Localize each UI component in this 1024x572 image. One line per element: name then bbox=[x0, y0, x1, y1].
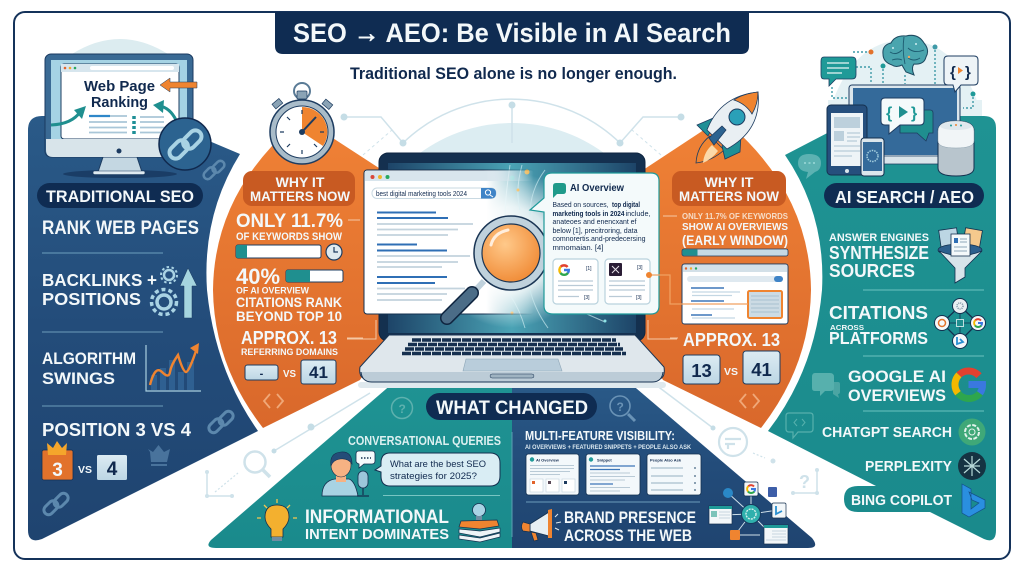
stat: approx 13 referring domains: 41 bbox=[309, 363, 328, 382]
stat: approx 13 referring domains: VS bbox=[283, 368, 296, 380]
icon: laptop bbox=[849, 85, 960, 164]
overview paragraph: marketing tools in 2024 bbox=[552, 209, 624, 218]
icon: play code bubble: } bbox=[911, 105, 917, 122]
stat: 40 percent bbox=[236, 264, 343, 324]
icon: dark teal bubble bbox=[900, 110, 933, 141]
text: answer engines synthesize sources bbox=[829, 232, 929, 281]
chart: algorithm line bbox=[146, 343, 201, 391]
text: multi-feature visibility: AI OVERVIEWS + FEATURED SNIPPETS + PEOPLE ALSO ASK bbox=[525, 444, 691, 451]
card: AI overview bbox=[526, 454, 579, 495]
stat: approx 13 referring domains: APPROX. 13 bbox=[241, 328, 337, 348]
stat: only 11.7 percent: ONLY 11.7% bbox=[236, 211, 343, 232]
laptop bbox=[358, 153, 666, 388]
stat: 40 percent: BEYOND TOP 10 bbox=[236, 309, 342, 324]
laptop base bbox=[360, 335, 664, 380]
text: algorithm swings: ALGORITHM bbox=[42, 350, 136, 368]
icon: Bing logo bbox=[962, 484, 985, 517]
subtitle: Traditional SEO alone is no longer enough. bbox=[350, 65, 677, 83]
icon: rank tiles 3 vs 4: 3 bbox=[52, 460, 63, 481]
icon: gears and up arrow bbox=[152, 267, 197, 318]
icon: books with bulb bbox=[459, 504, 500, 542]
arrow: teal right bbox=[160, 106, 176, 120]
icon: tablet bbox=[827, 105, 867, 175]
icon: Google logo bbox=[955, 371, 983, 399]
icon: rank tiles 3 vs 4 bbox=[42, 441, 127, 481]
icon: person with microphone bbox=[322, 451, 375, 496]
panel: what changed multi-feature background bbox=[512, 383, 815, 548]
heading: traditional SEO: TRADITIONAL SEO bbox=[46, 187, 194, 206]
text: conversational queries: CONVERSATIONAL QUERIES bbox=[348, 434, 501, 448]
stat: approx 13 vs 41 right: APPROX. 13 bbox=[683, 330, 780, 350]
source card: X: [3] bbox=[637, 265, 643, 271]
card: AI overview: AI Overview bbox=[536, 458, 560, 462]
source card: X: [3] bbox=[636, 295, 642, 301]
search query text: best digital marketing tools 2024 bbox=[376, 191, 467, 198]
icon: code brackets right bbox=[740, 394, 759, 408]
text: brand presence across the web bbox=[564, 509, 696, 545]
text: web page ranking: Web Page bbox=[84, 78, 155, 95]
icon: smart speaker bbox=[938, 121, 974, 176]
text: ChatGPT search: CHATGPT SEARCH bbox=[822, 425, 952, 441]
source card: Google: [3] bbox=[584, 295, 590, 301]
illustration: AI devices bbox=[821, 35, 982, 176]
text: algorithm swings: SWINGS bbox=[42, 370, 115, 388]
icon: help bubble: ? bbox=[398, 402, 406, 416]
text: answer engines synthesize sources: ANSWER ENGINES bbox=[829, 232, 929, 244]
dotted connectors bbox=[832, 50, 973, 108]
text: web page ranking: Ranking bbox=[91, 94, 148, 111]
text: multi-feature visibility bbox=[525, 428, 691, 451]
icon: funnel of sources bbox=[938, 228, 982, 283]
text: rank web pages: RANK WEB PAGES bbox=[42, 218, 199, 239]
icon: brain bbox=[883, 35, 928, 75]
divider between sections bbox=[511, 432, 513, 537]
icon: search help bbox=[610, 396, 635, 421]
text: brand presence across the web: ACROSS THE WEB bbox=[564, 527, 692, 545]
title: SEO → AEO: Be Visible in AI Search bbox=[293, 18, 731, 48]
overview paragraph: top digital bbox=[612, 200, 640, 209]
keyboard bbox=[402, 340, 626, 354]
overview paragraph: anateoes and enencxant ef bbox=[552, 217, 636, 226]
stat: 40 percent: OF AI OVERVIEW bbox=[236, 286, 309, 296]
browser window with search results bbox=[364, 170, 534, 314]
panel: why it matters left background bbox=[213, 118, 385, 428]
icon: phone bbox=[861, 138, 884, 176]
heading: what changed: WHAT CHANGED bbox=[436, 398, 588, 419]
card: people also ask: People Also Ask bbox=[650, 458, 682, 462]
icon: chat bubble bbox=[821, 57, 856, 86]
stat: 40 percent: CITATIONS RANK bbox=[236, 295, 342, 310]
stat: keywords early window bbox=[682, 211, 788, 256]
source card: X bbox=[605, 259, 650, 304]
panel: AI search background bbox=[768, 116, 996, 540]
laptop shadow bbox=[358, 382, 666, 388]
stat: 40 percent: 40% bbox=[236, 264, 280, 289]
text: answer engines synthesize sources: SOURCES bbox=[829, 261, 915, 281]
heading: AI overview: AI Overview bbox=[570, 182, 625, 194]
arrow: teal left bbox=[51, 112, 80, 125]
icon: rocket bbox=[696, 92, 758, 163]
stat: approx 13 referring domains bbox=[241, 328, 338, 384]
overview paragraph: include, bbox=[626, 209, 650, 218]
icon: link circle bbox=[159, 118, 211, 170]
stat: only 11.7 percent bbox=[236, 211, 343, 260]
icon: AI chat bubble bbox=[553, 183, 566, 198]
heading: why it matters left: WHY IT bbox=[276, 174, 325, 190]
heading: AI search / AEO: AI SEARCH / AEO bbox=[835, 187, 974, 207]
AI overview card bbox=[530, 173, 659, 314]
stat: keywords early window: (EARLY WINDOW) bbox=[682, 233, 788, 248]
text: backlinks and positions bbox=[42, 270, 157, 309]
overview paragraph: comnorertis.and-predecersing bbox=[552, 234, 646, 243]
icon: chat decorations bbox=[786, 373, 840, 438]
panel: why it matters right background bbox=[640, 118, 811, 428]
text: Perplexity: PERPLEXITY bbox=[865, 459, 952, 475]
heading: why it matters left bbox=[243, 171, 355, 206]
card: people also ask bbox=[647, 454, 701, 495]
icon: monitor with web page ranking bbox=[45, 39, 197, 178]
text: informational intent dominates bbox=[305, 507, 449, 543]
heading: why it matters right: WHY IT bbox=[705, 174, 754, 190]
icon: crown decoration bbox=[148, 445, 170, 466]
trackpad bbox=[463, 359, 562, 371]
stat: approx 13 referring domains: - bbox=[260, 368, 264, 380]
icon: light bulb bbox=[257, 499, 297, 541]
icon: code bubble: { bbox=[950, 64, 956, 81]
panel: what changed conversational background bbox=[208, 383, 512, 548]
text: position 3 vs 4: POSITION 3 VS 4 bbox=[42, 420, 191, 440]
icon: stopwatch bbox=[270, 83, 334, 164]
text: answer engines synthesize sources: SYNTHESIZE bbox=[829, 243, 929, 263]
overview paragraph: mmomaian. [4] bbox=[552, 243, 604, 252]
arrow: orange pointer bbox=[160, 78, 197, 92]
text: multi-feature visibility: MULTI-FEATURE VISIBILITY: bbox=[525, 428, 675, 443]
text: question mark decoration: ? bbox=[799, 472, 810, 492]
card: snippet bbox=[586, 454, 640, 495]
stat: only 11.7 percent: OF KEYWORDS SHOW bbox=[236, 231, 343, 243]
text: web page ranking bbox=[84, 78, 155, 111]
icon: play code bubble bbox=[881, 98, 924, 134]
text: informational intent dominates: INTENT DOMINATES bbox=[305, 526, 449, 543]
overview paragraph: Based on sources, bbox=[552, 200, 608, 209]
icon: search help: ? bbox=[616, 400, 624, 414]
icon: code brackets left bbox=[264, 394, 283, 408]
stat: approx 13 vs 41 right: 41 bbox=[751, 359, 772, 380]
icon: play code bubble: { bbox=[886, 105, 892, 122]
glow on screen bbox=[432, 172, 588, 328]
text: citations across platforms: CITATIONS bbox=[829, 303, 928, 323]
icon: brand network bbox=[709, 482, 788, 544]
stat: keywords early window: ONLY 11.7% OF KEYWORDS bbox=[682, 211, 788, 221]
icon: help bubble bbox=[392, 398, 412, 418]
text: citations across platforms: ACROSS bbox=[830, 325, 864, 332]
decorative brackets near laptop bbox=[347, 216, 678, 339]
text: backlinks and positions: POSITIONS bbox=[42, 289, 141, 309]
text: Google AI overviews bbox=[848, 367, 946, 405]
callout: example query bubble: What are the best SEO bbox=[390, 459, 486, 470]
text: informational intent dominates: INFORMATIONAL bbox=[305, 507, 449, 528]
text: Google AI overviews: GOOGLE AI bbox=[848, 367, 946, 386]
text: Bing Copilot: BING COPILOT bbox=[851, 493, 952, 509]
stat: approx 13 vs 41 right bbox=[683, 330, 780, 384]
icon: mini browser with highlight bbox=[682, 264, 788, 324]
text: citations across platforms: PLATFORMS bbox=[829, 328, 928, 348]
title bbox=[275, 12, 749, 54]
text: backlinks and positions: BACKLINKS + bbox=[42, 270, 157, 290]
magnifying glass bbox=[447, 216, 548, 318]
heading: why it matters left: MATTERS NOW bbox=[250, 188, 351, 204]
overview paragraph: below [1], precitroring, data bbox=[552, 226, 638, 235]
laptop screen bbox=[379, 153, 645, 341]
callout: example query bubble bbox=[375, 453, 500, 486]
icon: ChatGPT logo bbox=[958, 418, 986, 446]
text: brand presence across the web: BRAND PRESENCE bbox=[564, 509, 696, 527]
icon: code bubble: } bbox=[965, 64, 971, 81]
stat: approx 13 vs 41 right: 13 bbox=[691, 360, 712, 381]
icon: rank tiles 3 vs 4: 4 bbox=[107, 459, 118, 480]
stat: approx 13 referring domains: REFERRING DOMAINS bbox=[241, 347, 338, 358]
callout: example query bubble: strategies for 2025? bbox=[390, 471, 477, 482]
text: algorithm swings bbox=[42, 350, 136, 388]
icon: chain decorations bbox=[42, 159, 235, 517]
connector: source to highlight bbox=[646, 272, 748, 304]
icon: Perplexity logo bbox=[958, 452, 986, 480]
heading: why it matters right: MATTERS NOW bbox=[679, 188, 780, 204]
overview paragraph bbox=[552, 200, 650, 252]
panel: traditional SEO background bbox=[28, 116, 258, 540]
heading: why it matters right bbox=[672, 171, 786, 206]
icon: rank tiles 3 vs 4: VS bbox=[78, 464, 92, 476]
source card: Google: [1] bbox=[586, 266, 592, 272]
icon: code bubble bbox=[944, 56, 978, 92]
text: Google AI overviews: OVERVIEWS bbox=[848, 386, 946, 405]
icon: megaphone bbox=[522, 509, 561, 541]
card: snippet: Snippet bbox=[597, 458, 612, 462]
decorative icons white gap bbox=[205, 428, 819, 498]
stat: approx 13 vs 41 right: VS bbox=[724, 366, 738, 378]
source card: Google bbox=[553, 259, 598, 304]
stat: keywords early window: SHOW AI OVERVIEWS bbox=[682, 221, 788, 233]
text: citations across platforms bbox=[829, 303, 928, 348]
icon: citation network bbox=[934, 298, 986, 348]
icon: teal chat decoration bbox=[798, 154, 821, 179]
background network lines bbox=[272, 99, 716, 454]
